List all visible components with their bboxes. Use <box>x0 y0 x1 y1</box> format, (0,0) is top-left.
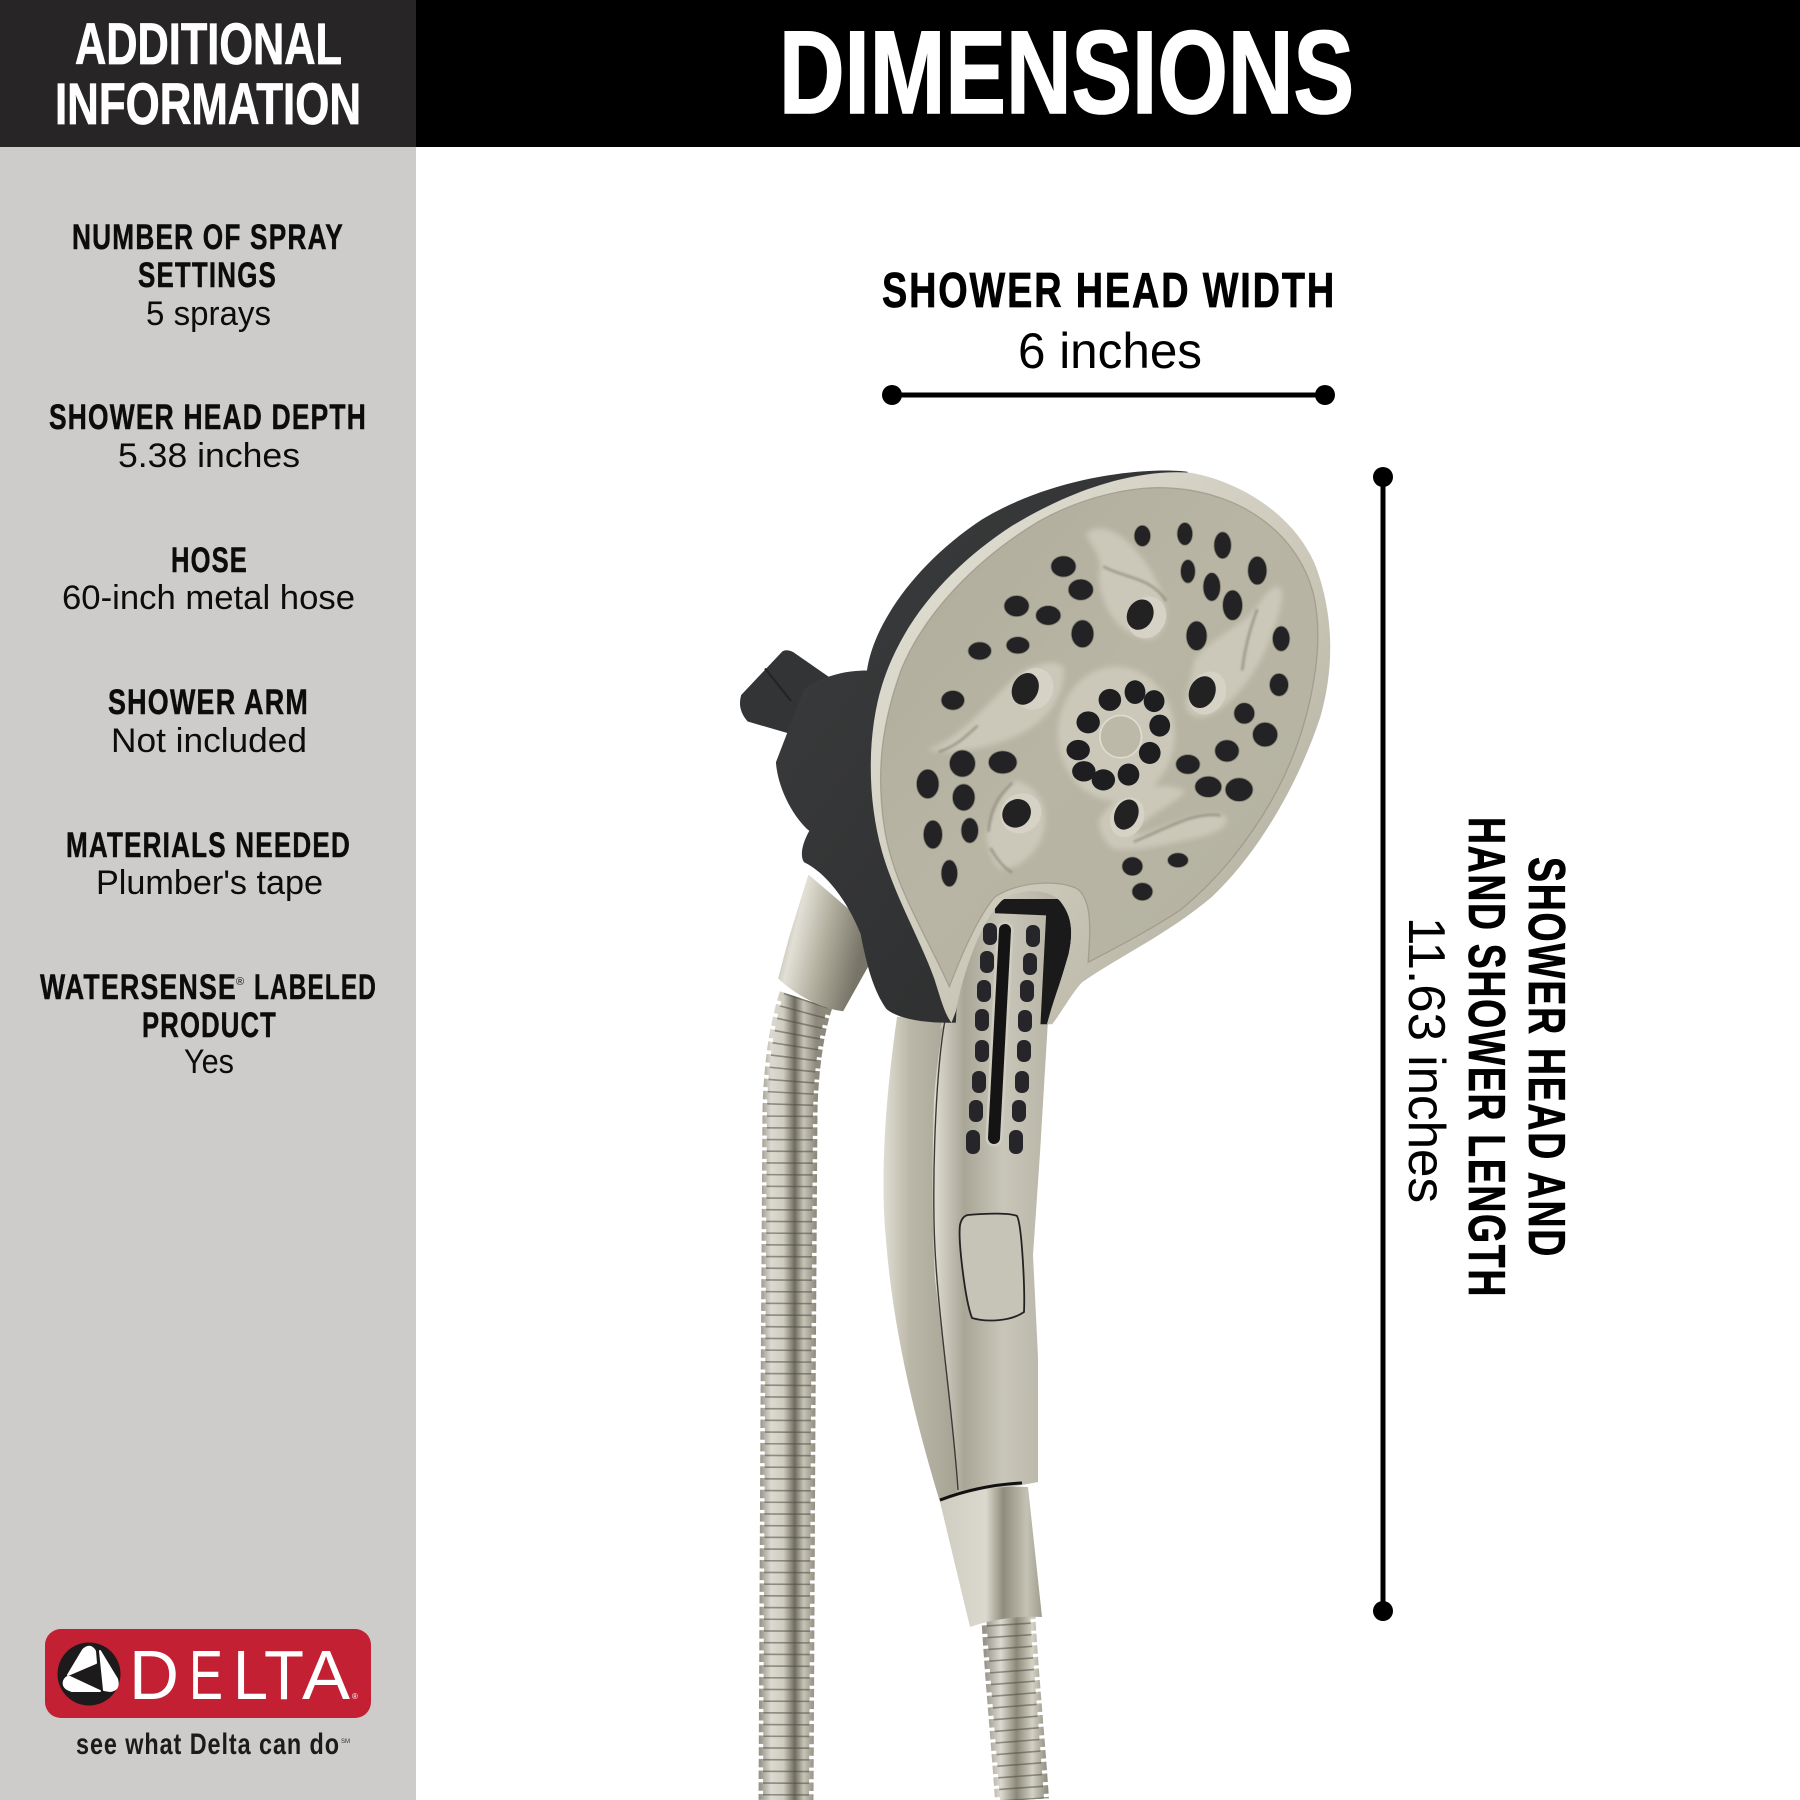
logo wordmark: L <box>233 1636 268 1714</box>
spec: shower arm <box>108 683 309 760</box>
spec: hose: HOSE <box>171 541 248 580</box>
registered mark: ® <box>352 1692 358 1701</box>
logo wordmark: E <box>189 1636 223 1714</box>
spec: materials needed: MATERIALS NEEDED <box>66 826 351 865</box>
spec: watersense labeled product: WATERSENSE <box>40 968 237 1007</box>
spec: shower head depth: 5.38 inches <box>118 437 300 475</box>
face crease lines <box>939 566 1257 872</box>
handle cap <box>940 1487 1042 1627</box>
service mark: SM <box>341 1739 350 1745</box>
spec: materials needed: Plumber's tape <box>96 864 323 902</box>
head face rim <box>871 472 1330 1024</box>
spec: number of spray settings: SETTINGS <box>138 256 277 295</box>
handle front panel <box>933 890 1060 1497</box>
tagline: see what Delta can do <box>76 1728 340 1761</box>
head face panel <box>881 488 1318 987</box>
heading: additional information <box>55 12 361 137</box>
small nozzles <box>916 522 1290 901</box>
spec: shower head depth: SHOWER HEAD DEPTH <box>49 398 367 437</box>
handle seam <box>934 1020 958 1490</box>
spec: watersense labeled product: ® <box>236 976 244 988</box>
logo: Delta <box>45 1629 371 1761</box>
hand shower body <box>883 890 1060 1627</box>
spec: number of spray settings: NUMBER OF SPRAY <box>72 218 344 257</box>
center ring nozzles <box>1066 680 1170 790</box>
dimension line: length <box>1373 467 1393 1621</box>
icon: Delta emblem <box>58 1642 120 1706</box>
knob ridge <box>765 668 791 701</box>
heading: shower head and hand shower length: 11.63 inches <box>1397 917 1455 1203</box>
logo red badge <box>45 1629 371 1718</box>
heading: shower head and hand shower length: SHOWER HEAD AND <box>1517 857 1575 1258</box>
spec: number of spray settings: 5 sprays <box>146 295 271 333</box>
spec: number of spray settings <box>72 218 344 333</box>
spec: watersense labeled product: LABELED <box>254 968 377 1007</box>
heading: shower head width: 6 inches <box>1018 323 1202 379</box>
dark back shell <box>776 471 1188 1023</box>
spray nozzles <box>966 923 1040 1154</box>
spec: shower head depth <box>49 398 367 475</box>
logo wordmark: D <box>129 1636 179 1714</box>
spec: watersense labeled product <box>40 968 377 1081</box>
panel: additional information sidebar <box>0 0 416 1800</box>
large nozzles <box>993 591 1233 842</box>
handle button <box>960 1214 1024 1320</box>
spec: hose: 60-inch metal hose <box>62 579 355 617</box>
logo wordmark: T <box>264 1636 304 1714</box>
right hose <box>1008 1612 1022 1800</box>
heading: shower head width: SHOWER HEAD WIDTH <box>882 264 1336 318</box>
handle cap ring <box>940 1483 1022 1500</box>
spec: materials needed <box>66 826 351 902</box>
spec: shower arm: SHOWER ARM <box>108 683 309 722</box>
heading: shower head width <box>882 264 1336 379</box>
face contours <box>926 528 1282 869</box>
heading: additional information: INFORMATION <box>55 72 361 137</box>
spec: hose <box>62 541 355 617</box>
spec: shower arm: Not included <box>111 722 307 760</box>
title: DIMENSIONS <box>779 7 1354 139</box>
heading: shower head and hand shower length: HAND SHOWER LENGTH <box>1457 817 1515 1298</box>
heading: additional information: ADDITIONAL <box>75 12 342 77</box>
center disk <box>1100 715 1142 758</box>
knob <box>740 650 834 738</box>
spec: watersense labeled product: PRODUCT <box>142 1006 277 1045</box>
spec: watersense labeled product: Yes <box>184 1043 234 1081</box>
heading: shower head and hand shower length <box>1397 817 1575 1298</box>
handle side panel <box>883 1010 960 1502</box>
sidebar background <box>0 147 416 1800</box>
logo wordmark: A <box>302 1636 350 1714</box>
spray slot <box>994 930 1005 1138</box>
notch shadow <box>995 899 1071 1024</box>
hose nut arm <box>778 875 868 1011</box>
bracket and head shell <box>740 471 1330 1024</box>
spray slot inner <box>994 930 1005 1138</box>
left hose <box>786 1000 806 1800</box>
product illustration: hand shower <box>740 471 1330 1800</box>
dimension line: width <box>882 385 1335 405</box>
sidebar header band <box>0 0 416 147</box>
title band: dimensions <box>416 0 1800 147</box>
